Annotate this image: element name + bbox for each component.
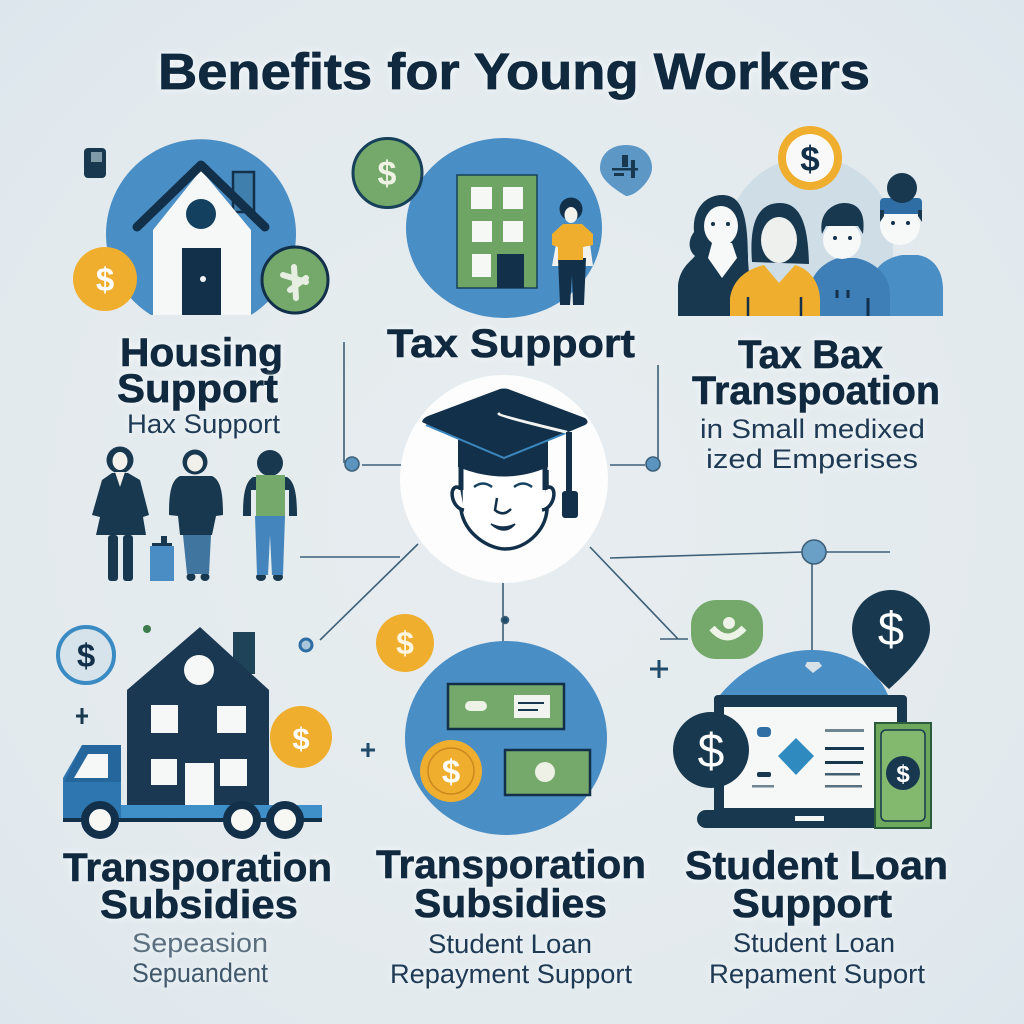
icon: house on truck	[58, 625, 332, 835]
title: Benefits for Young Workers	[158, 43, 870, 100]
heading: transportation subsidies middle: Student Loan	[428, 929, 592, 959]
icon: student loan laptop: $	[896, 761, 910, 788]
icon: cash in circle	[361, 614, 607, 835]
heading: transportation subsidies left: Sepuandent	[132, 958, 268, 988]
heading: transportation subsidies middle: Subsidies	[414, 882, 607, 926]
heading: transportation subsidies left: Subsidies	[100, 883, 298, 927]
icon: housing support	[73, 139, 328, 315]
heading: housing support: Support	[117, 367, 278, 411]
icon: group of young workers	[678, 126, 943, 316]
heading: housing support: Housing	[120, 331, 283, 375]
heading: housing support	[117, 331, 283, 439]
heading: student loan support: Repament Suport	[709, 959, 926, 989]
heading: student loan support: Support	[732, 882, 892, 926]
icon: housing support: $	[96, 261, 114, 298]
icon: house on truck: $	[77, 637, 95, 674]
heading: student loan support: Student Loan	[685, 844, 948, 888]
heading: transportation subsidies middle: Transporation	[376, 843, 646, 887]
icon: student loan laptop: $	[698, 725, 724, 778]
heading: tax box transportation	[692, 333, 940, 474]
heading: transportation subsidies left	[63, 846, 332, 988]
connector lines	[300, 342, 890, 651]
heading: student loan support	[685, 844, 948, 989]
icon: house on truck: $	[292, 721, 310, 756]
icon: three people	[92, 446, 297, 581]
icon: group of young workers: $	[800, 140, 820, 179]
icon: cash in circle: $	[442, 753, 460, 790]
central graduate icon	[400, 375, 608, 583]
icon: student loan laptop	[650, 590, 931, 828]
heading: tax box transportation: Tax Bax	[738, 333, 883, 377]
heading: housing support: Hax Support	[127, 409, 280, 439]
heading: transportation subsidies left: Sepeasion	[132, 928, 268, 958]
heading: tax box transportation: ized Emperises	[706, 444, 918, 474]
icon: tax support	[353, 138, 652, 318]
heading: tax box transportation: in Small medixed	[700, 414, 925, 444]
icon: cash in circle: $	[396, 625, 414, 661]
heading: transportation subsidies left: Transporation	[63, 846, 332, 890]
heading: transportation subsidies middle: Repayment Support	[390, 959, 633, 989]
heading: tax support: Tax Support	[387, 322, 635, 366]
heading: tax box transportation: Transpoation	[692, 369, 940, 413]
heading: transportation subsidies middle	[376, 843, 646, 989]
heading: student loan support: Student Loan	[733, 928, 895, 958]
icon: student loan laptop: $	[878, 602, 904, 655]
icon: tax support: $	[378, 155, 397, 193]
